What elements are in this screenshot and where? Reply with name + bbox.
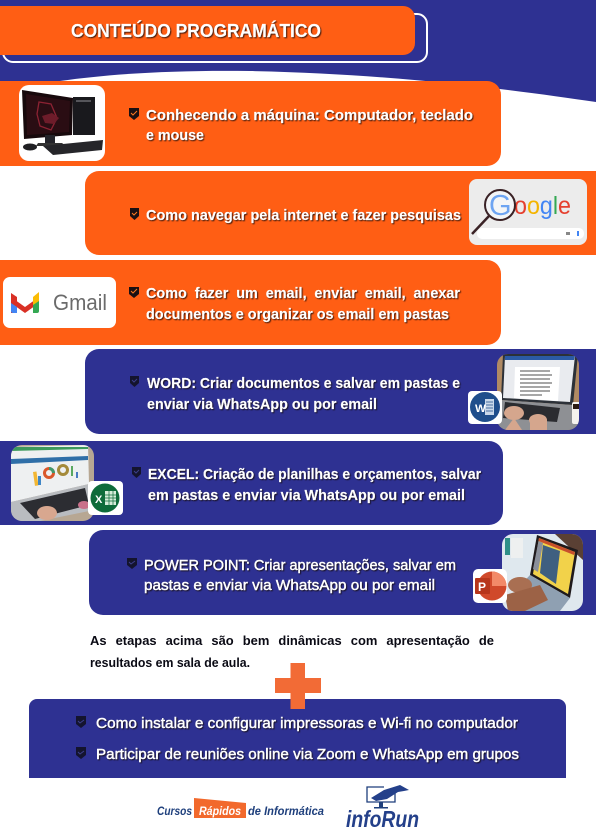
- text: gmail: documentos e organizar os email em pastas: [146, 306, 449, 323]
- icon: gmail logo: Gmail: [53, 290, 107, 315]
- text: google: Como navegar pela internet e fazer pesquisas: [146, 207, 461, 224]
- icon: check shield: [132, 467, 141, 478]
- text block: note: resultados em sala de aula.: [90, 655, 250, 670]
- logo: cursos rapidos: de Informática: [248, 806, 325, 818]
- text: excel: EXCEL: Criação de planilhas e orçamentos, salvar: [148, 466, 481, 483]
- text: extras: Participar de reuniões online via Zoom e WhatsApp em grupos: [96, 746, 519, 763]
- icon: plus sign: [275, 663, 321, 709]
- text: power point: pastas e enviar via WhatsApp ou por email: [144, 577, 435, 594]
- icon: computer photo: [19, 85, 105, 161]
- logo: cursos rapidos: Cursos: [157, 806, 192, 818]
- icon: check shield: [129, 108, 139, 120]
- icon: google search image: oogle: [514, 192, 571, 220]
- text: power point: [144, 557, 456, 594]
- icon: check shield: [130, 376, 139, 387]
- text: excel: [148, 466, 481, 504]
- text: extras: [96, 715, 519, 763]
- panel: power point: [89, 530, 596, 615]
- title banner: [0, 6, 427, 62]
- text: excel: em pastas e enviar via WhatsApp ou por email: [148, 487, 465, 504]
- text: word: WORD: Criar documentos e salvar em pastas e: [147, 375, 460, 392]
- icon: check shield: [127, 558, 137, 569]
- logo: cursos rapidos: Rápidos: [199, 806, 241, 818]
- text: computer: Conhecendo a máquina: Computador, teclado: [146, 107, 473, 124]
- panel: google: [85, 171, 596, 255]
- text: power point: POWER POINT: Criar apresentações, salvar em: [144, 557, 456, 574]
- text: computer: [146, 107, 473, 144]
- text: extras: Como instalar e configurar impressoras e Wi-fi no computador: [96, 715, 518, 732]
- text block: note: As etapas acima são bem dinâmicas com apresentação de: [90, 633, 494, 648]
- logo: inforun: [346, 785, 419, 831]
- panel: excel: [0, 441, 503, 525]
- icon: power point laptop photo: [473, 534, 583, 611]
- icon: word laptop photo: [468, 354, 581, 430]
- text: word: [147, 375, 460, 413]
- title banner: CONTEÚDO PROGRAMÁTICO: [71, 20, 321, 41]
- icon: word laptop photo: W: [475, 403, 487, 415]
- icon: gmail logo: [3, 277, 116, 328]
- icon: google search image: [469, 179, 587, 245]
- icon: check shield: [130, 208, 139, 220]
- icon: check shield: [76, 747, 86, 759]
- icon: power point laptop photo: P: [478, 580, 486, 594]
- text: gmail: [146, 285, 460, 323]
- icon: check shield: [129, 287, 139, 298]
- icon: check shield: [76, 716, 86, 728]
- text block: note: [90, 633, 494, 670]
- panel: gmail: [0, 260, 501, 345]
- icon: google search image: G: [489, 190, 512, 222]
- logo: cursos rapidos: [157, 798, 325, 818]
- panel: extras: [29, 699, 566, 778]
- text: computer: e mouse: [146, 127, 204, 144]
- text: word: enviar via WhatsApp ou por email: [147, 396, 377, 413]
- navy wave background: [0, 0, 596, 102]
- text: gmail: Como fazer um email, enviar email, anexar: [146, 285, 460, 302]
- icon: excel laptop photo: X: [95, 494, 103, 506]
- panel: word: [85, 349, 596, 434]
- panel: computer: [0, 81, 501, 166]
- icon: excel laptop photo: [11, 445, 123, 521]
